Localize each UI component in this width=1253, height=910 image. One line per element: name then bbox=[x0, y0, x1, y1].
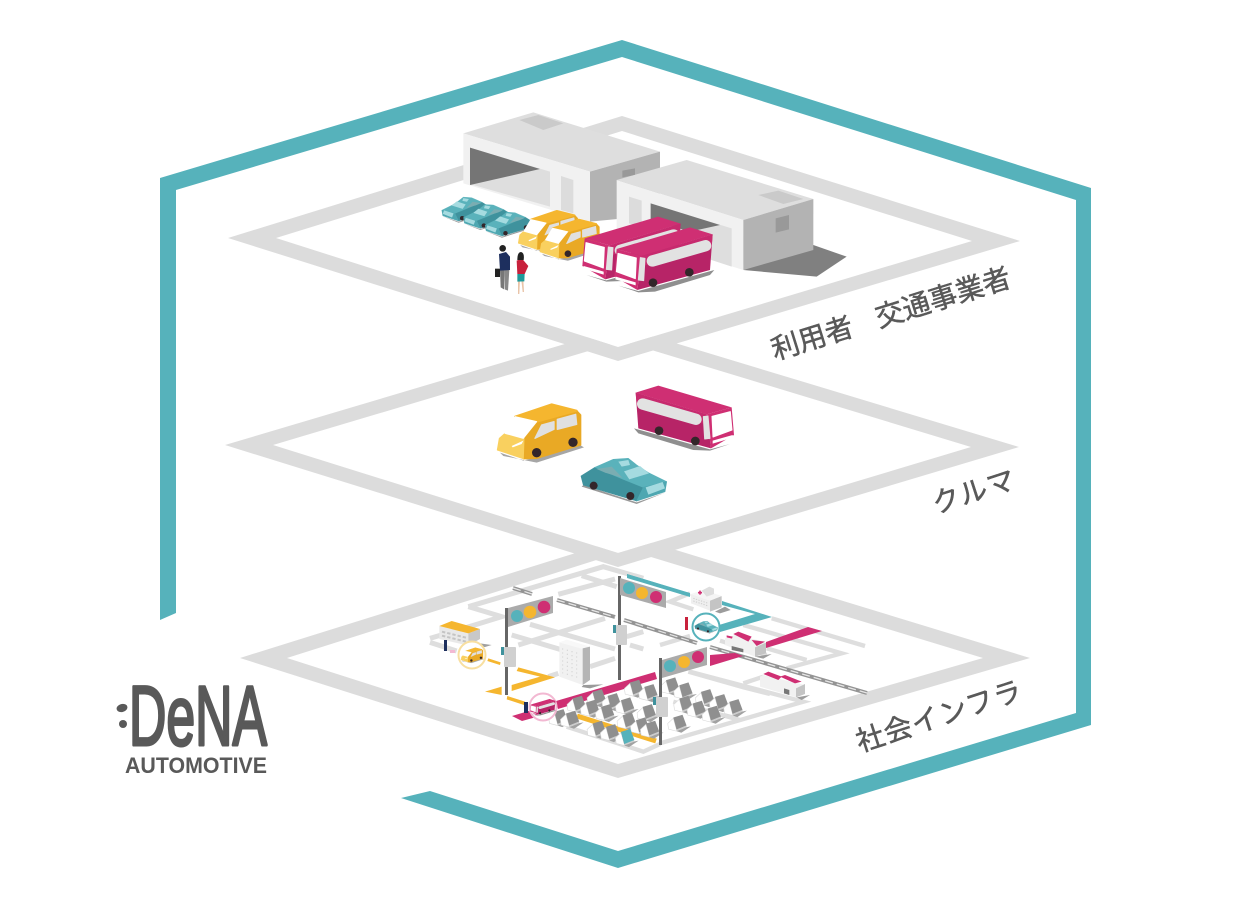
depot building right bbox=[617, 160, 847, 277]
logo wordmark: DeNA bbox=[129, 669, 267, 763]
yellow route bbox=[485, 658, 555, 705]
layer 3 label: 社会インフラ bbox=[852, 675, 1027, 758]
teal route bbox=[627, 574, 772, 632]
traffic signal 2 bbox=[613, 574, 666, 680]
layer 3 city map bbox=[430, 567, 867, 752]
station building bbox=[725, 632, 772, 659]
layer 1 scene: depots, vehicles and people bbox=[442, 112, 847, 294]
people bbox=[495, 245, 528, 294]
layer 3 platform: social infrastructure bbox=[240, 536, 1030, 778]
logo dots bbox=[116, 703, 128, 728]
logo subline: AUTOMOTIVE bbox=[125, 753, 267, 778]
taxi pin bbox=[685, 614, 720, 640]
layer 1 platform: users and operators bbox=[228, 116, 1020, 361]
layer 1 label: 利用者 交通事業者 bbox=[768, 262, 1015, 366]
road network bbox=[430, 567, 865, 752]
layer 2 label: クルマ bbox=[928, 464, 1020, 520]
lower yellow road bbox=[577, 716, 656, 741]
hexagon frame bbox=[160, 40, 1091, 868]
layer 2 vehicles bbox=[497, 386, 734, 504]
rail line bbox=[513, 588, 867, 693]
vans bbox=[518, 211, 602, 261]
bus bbox=[634, 386, 734, 451]
layer 2 platform: vehicles bbox=[225, 327, 1019, 567]
hospital building bbox=[691, 587, 731, 613]
van bbox=[497, 404, 584, 463]
office block bbox=[559, 640, 603, 688]
taxi bbox=[581, 458, 667, 504]
logo: DeNA Automotive bbox=[116, 669, 267, 778]
magenta route bbox=[512, 627, 822, 721]
traffic signal 3 bbox=[653, 647, 707, 745]
taxis bbox=[442, 197, 533, 238]
houses bbox=[549, 677, 747, 747]
depot building left bbox=[463, 112, 660, 222]
van pin bbox=[444, 640, 486, 668]
traffic signal 1 bbox=[501, 596, 553, 695]
buses bbox=[582, 217, 714, 292]
school building bbox=[439, 621, 492, 647]
mall building bbox=[760, 672, 810, 700]
bus pin bbox=[524, 694, 556, 720]
